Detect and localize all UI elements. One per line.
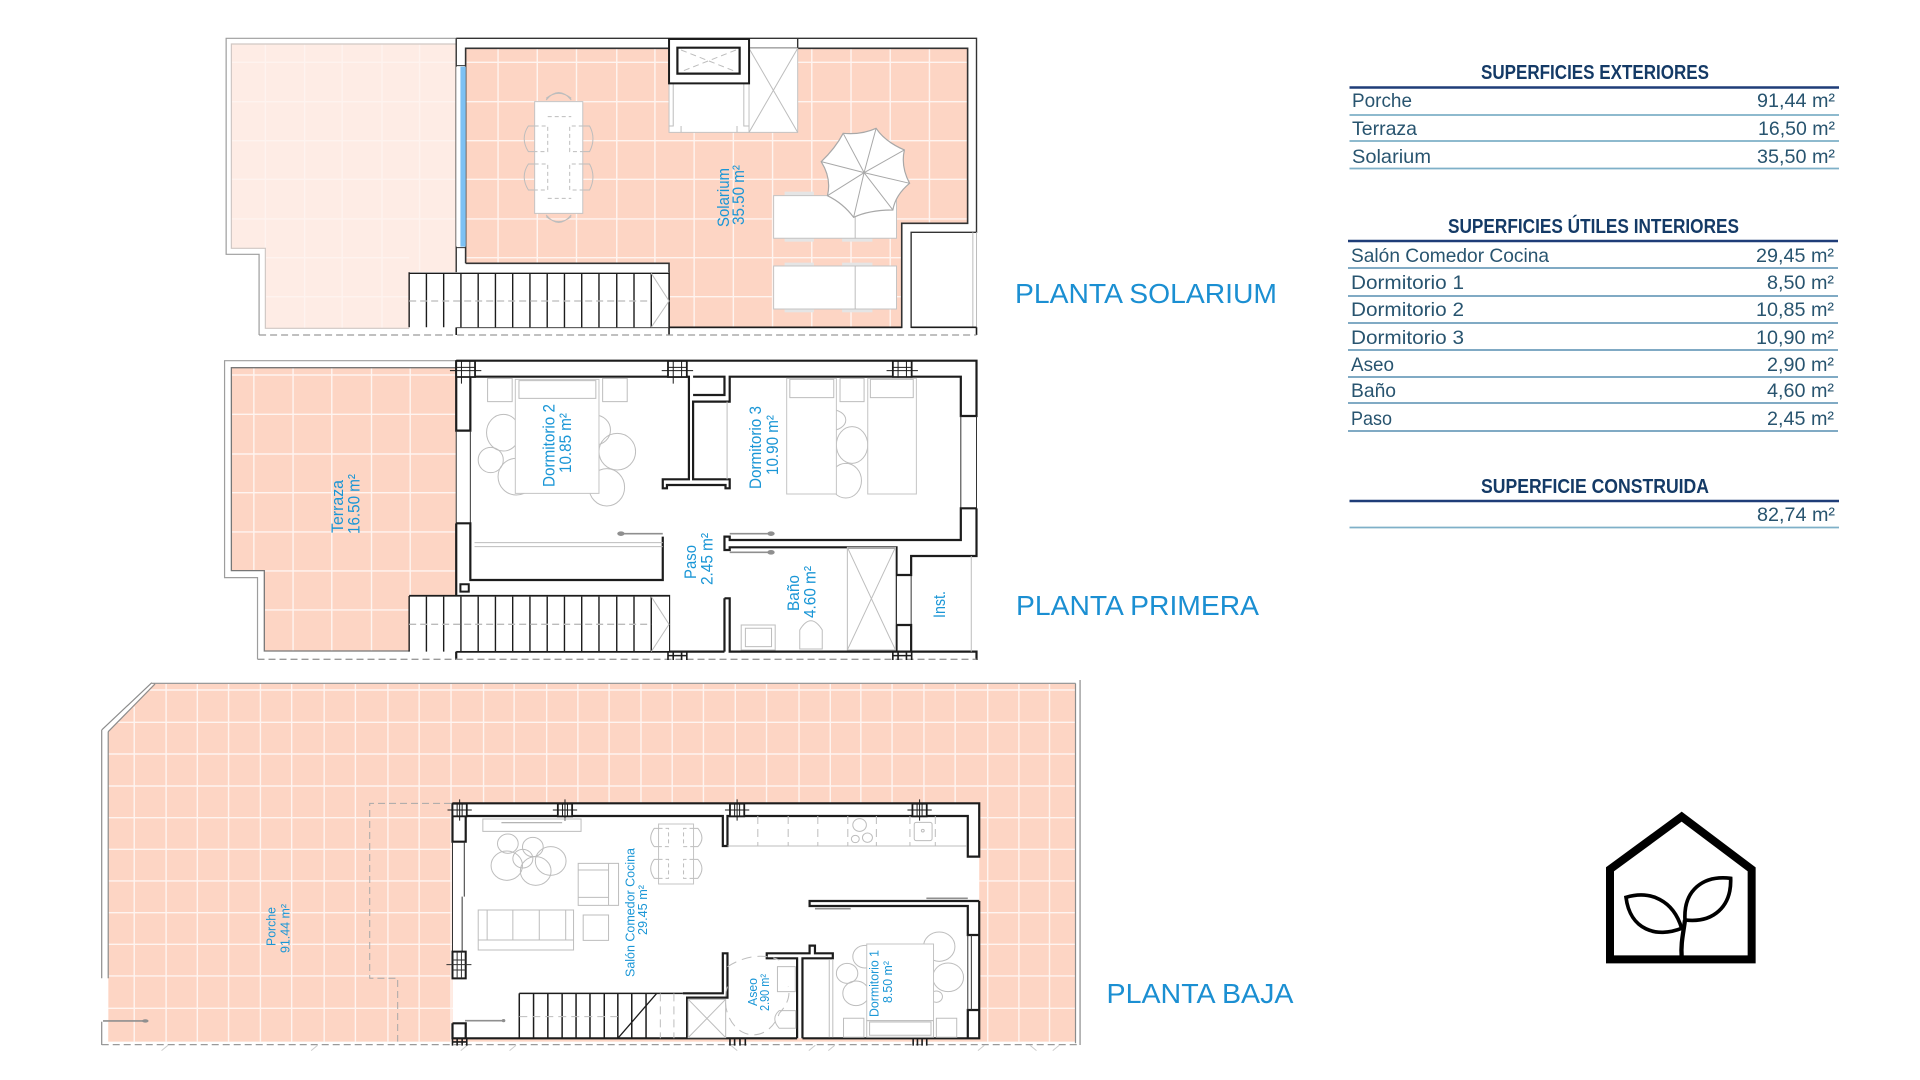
table: superficies exteriores: 91,44 m² bbox=[1757, 90, 1836, 112]
table: superficies exteriores bbox=[1350, 62, 1839, 168]
shaft and storage bbox=[669, 39, 798, 132]
table title: SUPERFICIES EXTERIORES bbox=[1481, 62, 1709, 84]
labels: planta baja rooms: 8.50 m² bbox=[880, 960, 895, 1003]
building interior and walls bbox=[446, 799, 979, 1046]
dining table with chairs bbox=[524, 92, 593, 222]
table: superficies exteriores: 35,50 m² bbox=[1757, 146, 1836, 168]
table: superficies utiles interiores: 2,90 m² bbox=[1767, 354, 1835, 376]
table: superficies exteriores: Porche bbox=[1352, 90, 1412, 112]
label: solarium: Solarium bbox=[715, 168, 733, 227]
table: superficies utiles interiores: Paso bbox=[1351, 408, 1392, 430]
table: superficies utiles interiores: 10,85 m² bbox=[1756, 299, 1835, 321]
labels: planta primera rooms: Paso bbox=[682, 545, 700, 579]
table: superficies utiles interiores: 10,90 m² bbox=[1756, 327, 1835, 349]
labels: planta baja rooms: Porche bbox=[264, 907, 278, 946]
furniture: salon bbox=[478, 819, 619, 950]
labels: planta baja rooms: Dormitorio 1 bbox=[866, 950, 882, 1017]
table: superficies utiles interiores: 29,45 m² bbox=[1756, 245, 1835, 267]
staircase bbox=[409, 272, 669, 327]
heading: planta baja: PLANTA BAJA bbox=[1106, 978, 1294, 1009]
heading: planta primera: PLANTA PRIMERA bbox=[1016, 590, 1259, 621]
staircase bbox=[409, 596, 669, 652]
labels: planta baja rooms: 29.45 m² bbox=[635, 884, 650, 935]
labels: planta primera rooms: Dormitorio 2 bbox=[540, 404, 558, 487]
labels: planta primera rooms: Inst. bbox=[931, 591, 949, 618]
table: superficies utiles interiores: Salón Comedor Cocina bbox=[1351, 245, 1549, 267]
table: superficies utiles interiores: Dormitorio 1 bbox=[1351, 272, 1464, 294]
furniture: dormitorio 2 bbox=[478, 378, 636, 506]
table: superficies utiles interiores: Dormitorio 2 bbox=[1351, 299, 1464, 321]
heading: planta solarium: PLANTA SOLARIUM bbox=[1015, 278, 1277, 309]
labels: planta baja rooms: 2.90 m² bbox=[757, 973, 772, 1011]
label: solarium: 35.50 m² bbox=[730, 165, 748, 225]
labels: planta baja rooms: Salón Comedor Cocina bbox=[622, 847, 638, 977]
table title: SUPERFICIE CONSTRUIDA bbox=[1481, 476, 1709, 498]
furniture: kitchen bbox=[727, 816, 967, 846]
table: superficie construida: 82,74 m² bbox=[1757, 504, 1836, 526]
labels: planta primera rooms: Baño bbox=[785, 575, 803, 611]
table: superficies exteriores: 16,50 m² bbox=[1758, 118, 1836, 140]
furniture: dining table bbox=[651, 824, 702, 884]
labels: planta primera rooms: 10.85 m² bbox=[557, 413, 575, 473]
labels: planta primera rooms: 4.60 m² bbox=[802, 566, 820, 618]
table: superficies exteriores: Solarium bbox=[1352, 146, 1431, 168]
floor plan: planta primera bbox=[225, 361, 977, 660]
labels: planta primera rooms: 16.50 m² bbox=[346, 474, 364, 534]
floor plan: planta solarium bbox=[226, 38, 977, 335]
furniture: aseo and dormitorio 1 bbox=[725, 932, 964, 1037]
labels: planta primera rooms: Dormitorio 3 bbox=[747, 406, 765, 489]
labels: planta primera rooms bbox=[329, 404, 949, 618]
table: superficies exteriores: Terraza bbox=[1352, 118, 1417, 140]
floor plan: planta baja bbox=[99, 680, 1080, 1051]
labels: planta primera rooms: 2.45 m² bbox=[698, 533, 716, 585]
labels: planta primera rooms: Terraza bbox=[329, 479, 347, 533]
sun loungers bbox=[774, 192, 897, 312]
parasol bbox=[821, 128, 910, 217]
labels: planta primera rooms: 10.90 m² bbox=[764, 415, 782, 475]
labels: planta baja rooms: Aseo bbox=[745, 978, 760, 1006]
label: solarium bbox=[715, 165, 748, 227]
walls bbox=[258, 361, 977, 660]
table title: SUPERFICIES ÚTILES INTERIORES bbox=[1448, 214, 1739, 238]
table: superficies utiles interiores: Baño bbox=[1351, 380, 1396, 402]
table: superficie construida bbox=[1350, 476, 1839, 528]
labels: planta baja rooms bbox=[264, 847, 895, 1017]
bathroom fixtures and door swings bbox=[617, 531, 895, 650]
table: superficies utiles interiores bbox=[1348, 214, 1838, 431]
table: superficies utiles interiores: 8,50 m² bbox=[1767, 272, 1835, 294]
labels: planta baja rooms: 91.44 m² bbox=[278, 903, 292, 953]
table: superficies utiles interiores: 2,45 m² bbox=[1767, 408, 1835, 430]
table: superficies utiles interiores: Dormitorio 3 bbox=[1351, 327, 1464, 349]
icon: house with sprout logo bbox=[1610, 817, 1752, 959]
table: superficies utiles interiores: Aseo bbox=[1351, 354, 1394, 376]
furniture: dormitorio 3 bbox=[727, 378, 916, 498]
table: superficies utiles interiores: 4,60 m² bbox=[1767, 380, 1835, 402]
